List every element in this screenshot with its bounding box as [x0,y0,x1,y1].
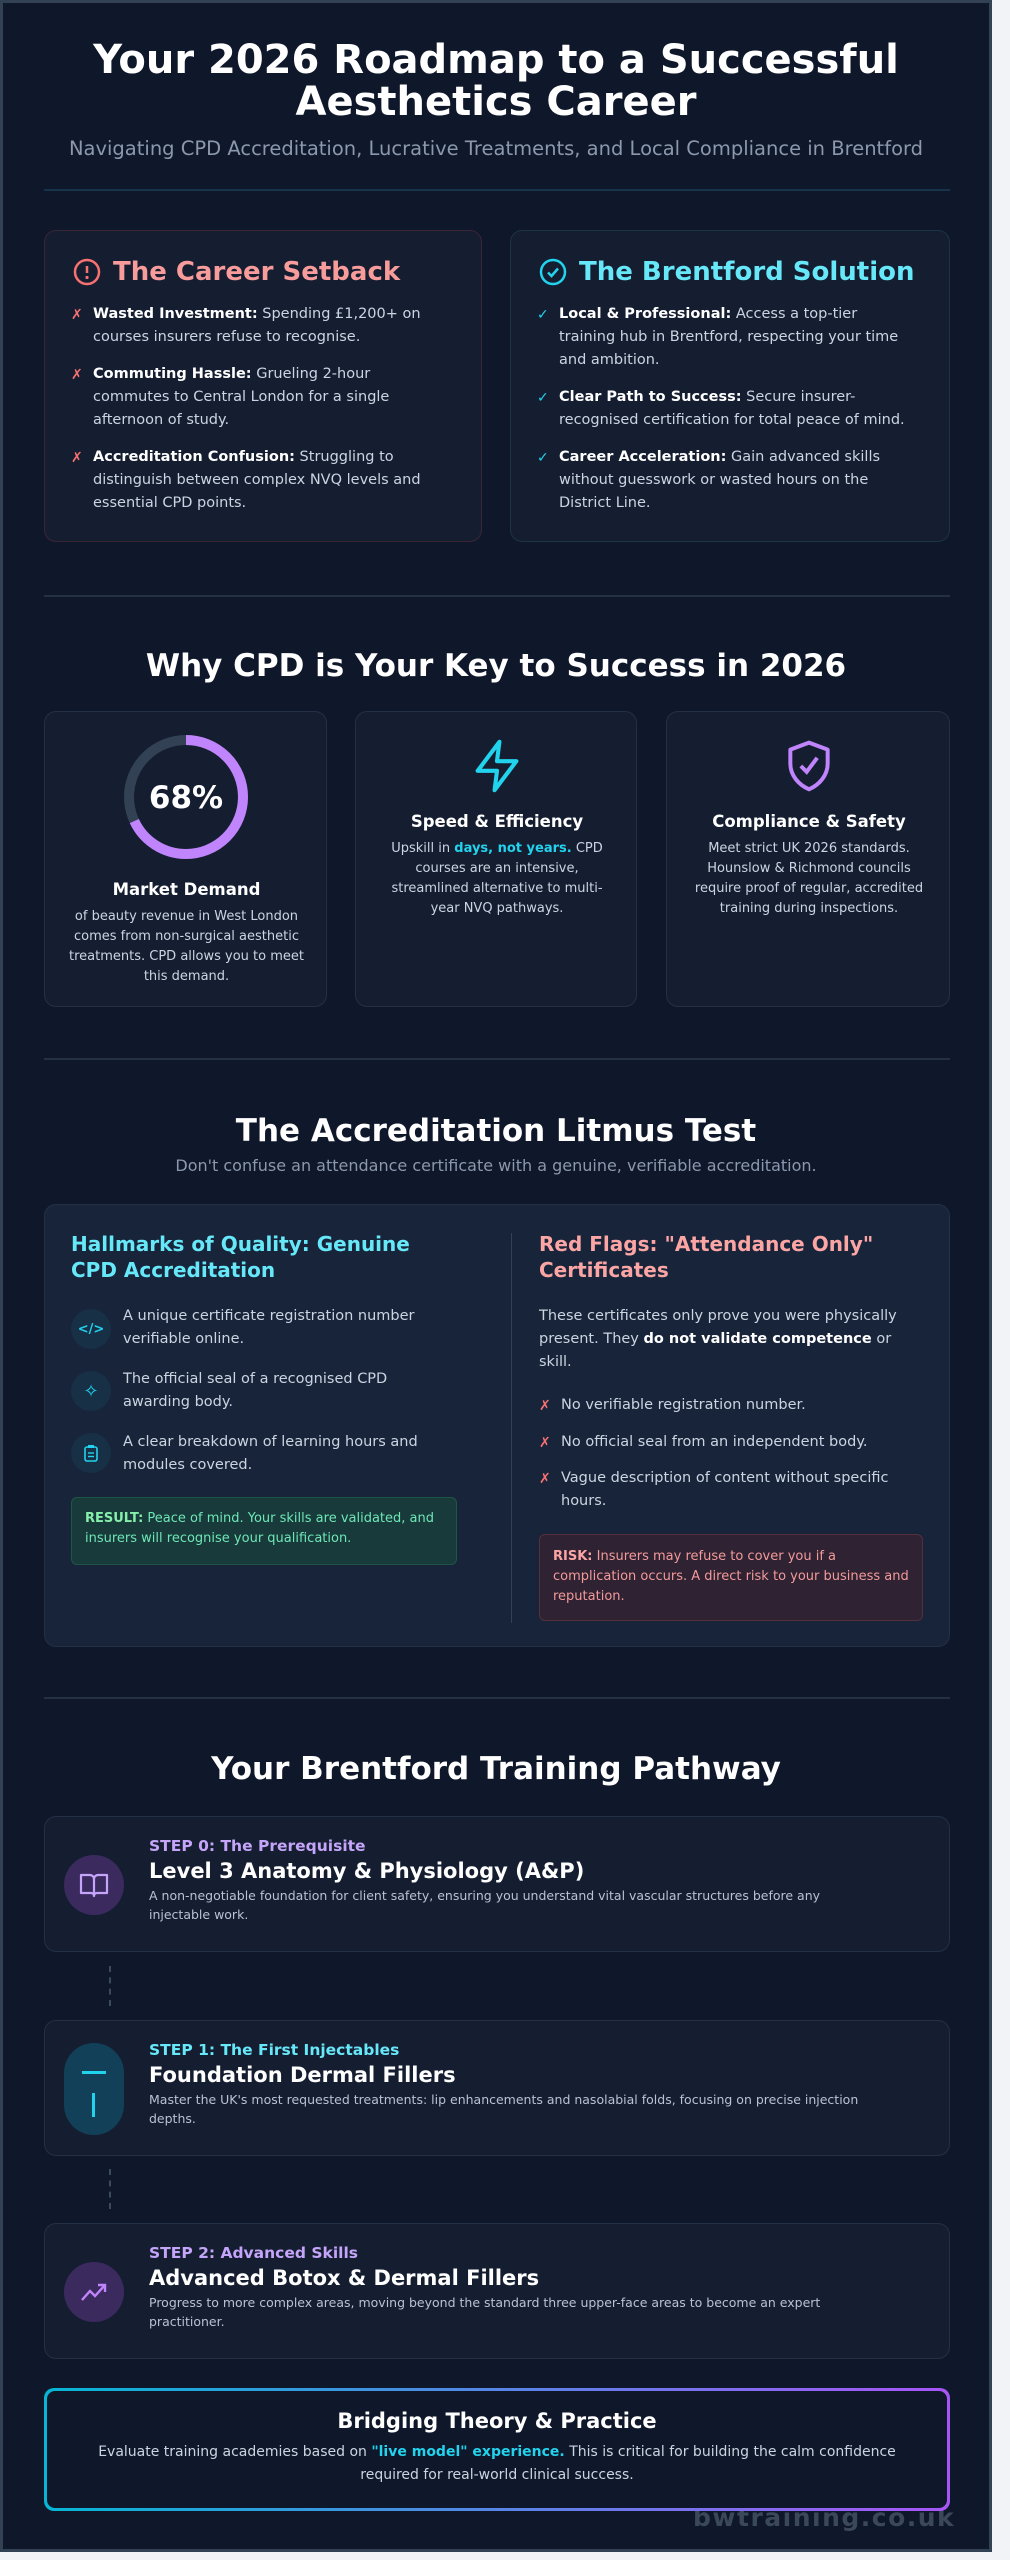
text: speed: Speed & Efficiency [411,812,583,831]
title: Aesthetics Career [296,79,696,125]
watermark: bwtraining.co.uk [693,2503,955,2532]
step 1: Foundation Dermal Fillers [149,2063,456,2087]
column: red flags: No verifiable registration number. [561,1397,806,1413]
panel: brentford solution [510,230,950,542]
heading: why CPD: Why CPD is Your Key to Success in 2026 [146,648,846,684]
heading: red flags: Red Flags: "Attendance Only" [539,1232,873,1256]
list: setbacks: Commuting Hassle: Grueling 2-hour commutes to Central London for a single afternoon of study. [93,366,389,428]
callout: bridging theory: Evaluate training academies based on "live model" experience. This is critical for building the calm confidence required for real-world clinical success. [98,2444,896,2483]
icon: sparkle [71,1371,111,1411]
step 1 [44,2020,950,2156]
panel: litmus comparison [44,1204,950,1647]
heading: hallmarks [71,1232,410,1282]
heading: litmus test: The Accreditation Litmus Test [236,1113,756,1149]
heading: hallmarks: Hallmarks of Quality: Genuine [71,1232,410,1256]
list: setbacks: Accreditation Confusion: Struggling to distinguish between complex NVQ levels and essential CPD points. [93,449,421,511]
panel: speed [355,711,637,1007]
text: speed: Upskill in days, not years. CPD courses are an intensive, streamlined alternative to multi-year NVQ pathways. [391,841,603,916]
list: solutions: Local & Professional: Access a top-tier training hub in Brentford, respecting your time and ambition. [559,306,898,368]
text: compliance: Meet strict UK 2026 standards. Hounslow & Richmond councils require proof of regular, accredited training during inspections. [695,841,923,916]
step 0: A non-negotiable foundation for client safety, ensuring you understand vital vascular structures before any injectable work. [149,1888,820,1922]
step 2: Advanced Botox & Dermal Fillers [149,2266,539,2290]
list: setbacks: ✗ [71,450,83,466]
callout: risk: RISK: Insurers may refuse to cover you if a complication occurs. A direct risk to your business and reputation. [553,1549,909,1604]
icon: shield [788,740,830,792]
icon: lightning [476,740,518,792]
step 1: Master the UK's most requested treatments: lip enhancements and nasolabial folds, focusing on precise injection depths. [149,2092,858,2126]
heading: red flags: Certificates [539,1258,669,1282]
subtitle: Navigating CPD Accreditation, Lucrative Treatments, and Local Compliance in Brentford [69,137,923,160]
text: market demand: Market Demand [113,880,260,899]
callout: bridging theory: Bridging Theory & Practice [337,2409,657,2433]
panel: career setback [44,230,482,542]
icon: code [71,1309,111,1349]
text: compliance: Compliance & Safety [712,812,906,831]
step 0 [44,1816,950,1952]
column: red flags [538,1232,923,1621]
chart: 68% ring [124,735,248,859]
list: solutions: Career Acceleration: Gain advanced skills without guesswork or wasted hours on the District Line. [559,449,880,511]
list: setbacks [71,306,421,511]
callout: result [71,1497,457,1565]
heading: career setback: The Career Setback [113,257,400,287]
heading: red flags [539,1232,873,1282]
subtitle: litmus: Don't confuse an attendance certificate with a genuine, verifiable accreditation. [175,1156,817,1175]
column: red flags: Vague description of content without specific hours. [561,1470,888,1509]
list: solutions: ✓ [537,307,549,323]
title: Your 2026 Roadmap to a Successful [93,37,899,83]
column: red flags: ✗ [539,1435,551,1451]
text: market demand: of beauty revenue in West London comes from non-surgical aesthetic treatments. CPD allows you to meet this demand. [69,909,304,984]
icon: sparkle: ✧ [83,1380,99,1402]
icon: code: </> [78,1322,104,1336]
panel: compliance [666,711,950,1007]
column: hallmarks: A clear breakdown of learning hours and modules covered. [123,1434,418,1473]
step 1: STEP 1: The First Injectables [149,2041,399,2059]
callout: risk [539,1534,923,1621]
icon: trend [64,2262,124,2322]
step 2: Progress to more complex areas, moving beyond the standard three upper-face areas to become an expert practitioner. [149,2295,820,2329]
column: red flags: These certificates only prove you were physically present. They do not validate competence or skill. [539,1308,897,1370]
step 2 [44,2223,950,2359]
icon: book [64,1855,124,1915]
column: red flags: No official seal from an independent body. [561,1434,867,1450]
column: hallmarks [71,1232,457,1565]
column: red flags: ✗ [539,1398,551,1414]
list: setbacks: ✗ [71,367,83,383]
step 0: STEP 0: The Prerequisite [149,1837,366,1855]
column: hallmarks: A unique certificate registration number verifiable online. [123,1308,414,1347]
column: hallmarks: The official seal of a recognised CPD awarding body. [123,1371,387,1410]
heading: solution: The Brentford Solution [579,257,915,287]
icon: syringe [64,2043,124,2135]
list: solutions: Clear Path to Success: Secure insurer-recognised certification for total peace of mind. [559,389,905,428]
step 0: Level 3 Anatomy & Physiology (A&P) [149,1859,584,1883]
column: red flags: ✗ [539,1471,551,1487]
chart: 68% ring: 68% [149,780,223,816]
list: solutions [537,306,905,511]
title [92,37,899,125]
step 2: STEP 2: Advanced Skills [149,2244,358,2262]
panel: market demand [44,711,327,1007]
list: setbacks: Wasted Investment: Spending £1,200+ on courses insurers refuse to recognise. [93,306,421,345]
list: solutions: ✓ [537,390,549,406]
icon: clipboard [71,1433,111,1473]
list: setbacks: ✗ [71,307,83,323]
heading: pathway: Your Brentford Training Pathway [211,1751,781,1787]
callout: bridging theory [44,2388,950,2511]
list: solutions: ✓ [537,450,549,466]
callout: result: RESULT: Peace of mind. Your skills are validated, and insurers will recognise your qualification. [85,1511,434,1546]
heading: hallmarks: CPD Accreditation [71,1258,275,1282]
